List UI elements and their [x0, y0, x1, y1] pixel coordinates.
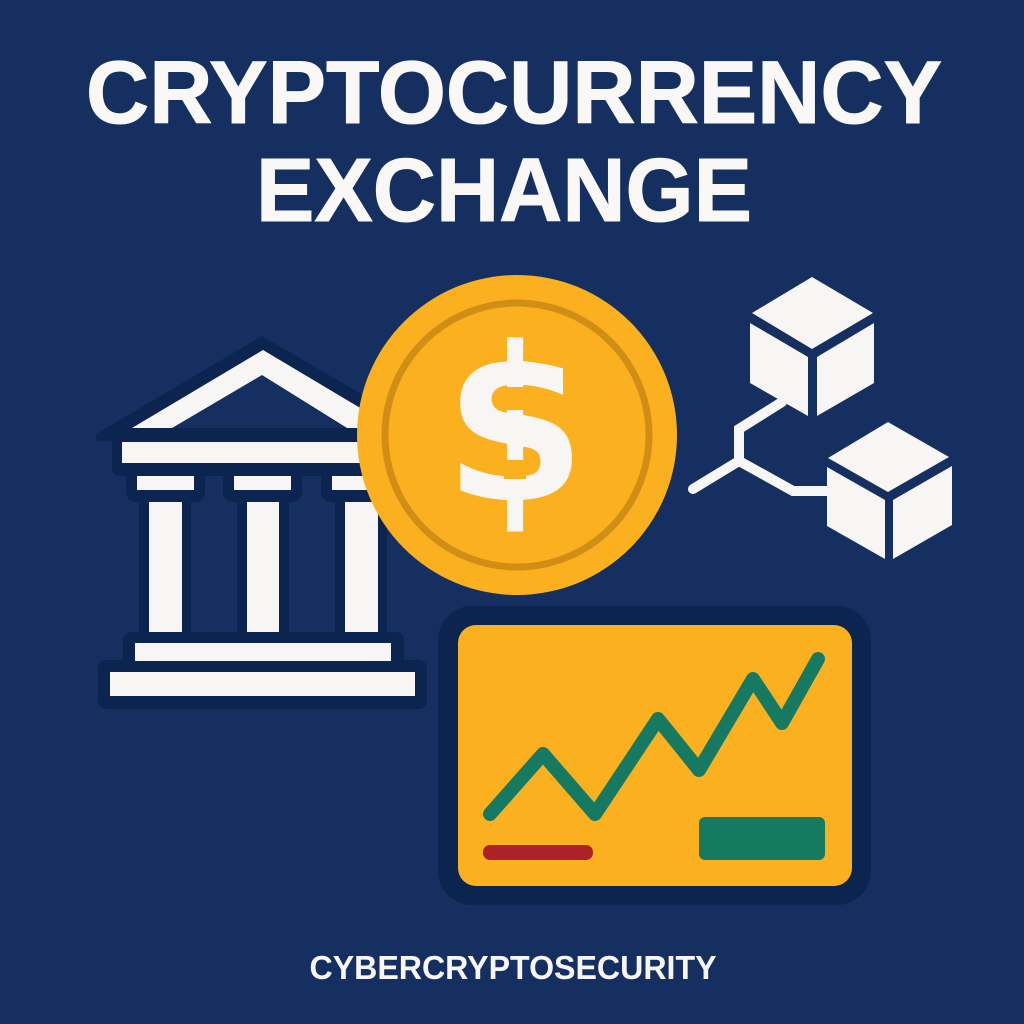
panel: trading chart [438, 606, 871, 905]
title: EXCHANGE [256, 141, 752, 241]
line chart [490, 659, 818, 814]
red bar [483, 845, 593, 860]
icon: gold dollar coin: $ [444, 302, 586, 551]
title: CRYPTOCURRENCY [86, 42, 942, 142]
icon: blockchain cubes [693, 277, 952, 559]
green button [699, 817, 825, 860]
icon: bank building [96, 336, 427, 709]
footer brand: CYBERCRYPTOSECURITY [310, 949, 716, 986]
title [86, 42, 942, 241]
icon: gold dollar coin [357, 275, 677, 595]
